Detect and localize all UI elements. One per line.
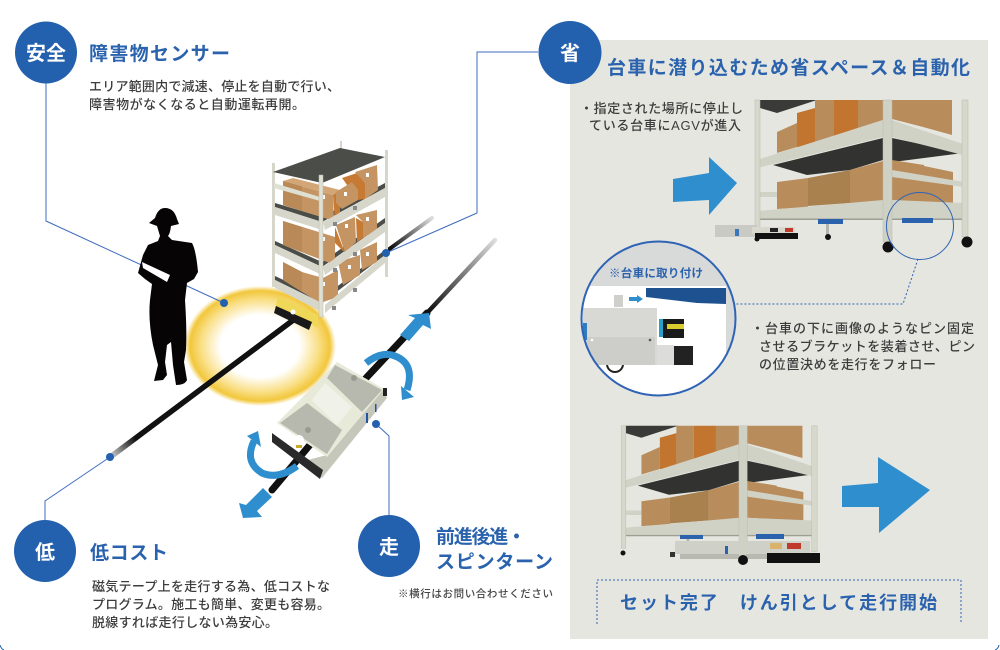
badge: drive: 走 xyxy=(379,536,399,559)
badge: safety: 安全 xyxy=(26,42,66,65)
magnetic tape xyxy=(113,218,495,490)
spin arrow: lower xyxy=(247,431,297,475)
text: obstacle sensor description xyxy=(89,79,340,112)
badge: low cost: 低 xyxy=(35,541,55,564)
leader line: safety xyxy=(46,83,228,307)
AGV under rack xyxy=(274,297,318,330)
straight arrow: backward xyxy=(239,488,272,518)
rack photo: AGV docked xyxy=(620,426,820,565)
text: obstacle sensor description: エリア範囲内で減速、停止を自動で行い、 xyxy=(89,79,340,94)
text: step two: させるブラケットを装着させ、ピン xyxy=(759,339,975,354)
note: lateral travel: ※横行はお問い合わせください xyxy=(398,587,553,600)
heading: forward reverse spin turn xyxy=(436,526,553,573)
text: obstacle sensor description: 障害物がなくなると自動運転再開。 xyxy=(89,97,305,112)
arrow: into rack xyxy=(673,157,737,215)
yellow sensor glow xyxy=(184,286,336,406)
arrow: starts towing xyxy=(842,457,930,533)
dotted frame xyxy=(597,580,961,624)
badge: safety xyxy=(15,22,77,84)
text: step two: の位置決めを走行をフォロー xyxy=(759,357,936,372)
text: low cost description xyxy=(92,579,330,630)
highlight circle and dotted leader xyxy=(735,192,954,304)
badge: low cost xyxy=(14,520,76,582)
text: step two: ・台車の下に画像のようなピン固定 xyxy=(751,321,974,336)
panel: space saving background xyxy=(570,40,988,639)
heading: obstacle sensor: 障害物センサー xyxy=(89,43,230,65)
corner marks xyxy=(0,645,999,650)
text: step one xyxy=(580,101,743,133)
text: low cost description: プログラム。施工も簡単、変更も容易。 xyxy=(92,597,330,612)
heading: space saving: 台車に潜り込むため省スペース＆自動化 xyxy=(607,57,970,79)
leader line: drive xyxy=(372,420,389,516)
heading: forward reverse spin turn: 前進後進・ xyxy=(436,526,526,548)
straight arrow: forward xyxy=(400,313,431,341)
spin arrow: upper xyxy=(366,354,414,400)
text: step one: ・指定された場所に停止し xyxy=(580,101,743,116)
badge: drive xyxy=(358,515,420,577)
text: low cost description: 脱線すれば走行しない為安心。 xyxy=(92,615,278,630)
heading: forward reverse spin turn: スピンターン xyxy=(436,551,553,573)
heading: low cost: 低コスト xyxy=(90,542,168,564)
text: low cost description: 磁気テープ上を走行する為、低コストな xyxy=(92,579,330,594)
text: step one: ている台車にAGVが進入 xyxy=(589,118,741,133)
leader line: low cost xyxy=(45,453,114,520)
callout: bracket detail xyxy=(580,242,736,398)
badge: space saving xyxy=(538,21,602,84)
text: step two xyxy=(751,321,975,372)
badge: space saving: 省 xyxy=(560,42,580,65)
worker silhouette xyxy=(138,208,198,385)
AGV robot xyxy=(272,362,387,479)
callout: bracket detail: ※台車に取り付け xyxy=(609,266,703,280)
rack photo: AGV entering xyxy=(715,100,972,252)
text: set complete: セット完了 けん引として走行開始 xyxy=(620,593,937,613)
storage rack with boxes xyxy=(272,141,388,317)
leader line: rack to space saving xyxy=(382,52,538,257)
